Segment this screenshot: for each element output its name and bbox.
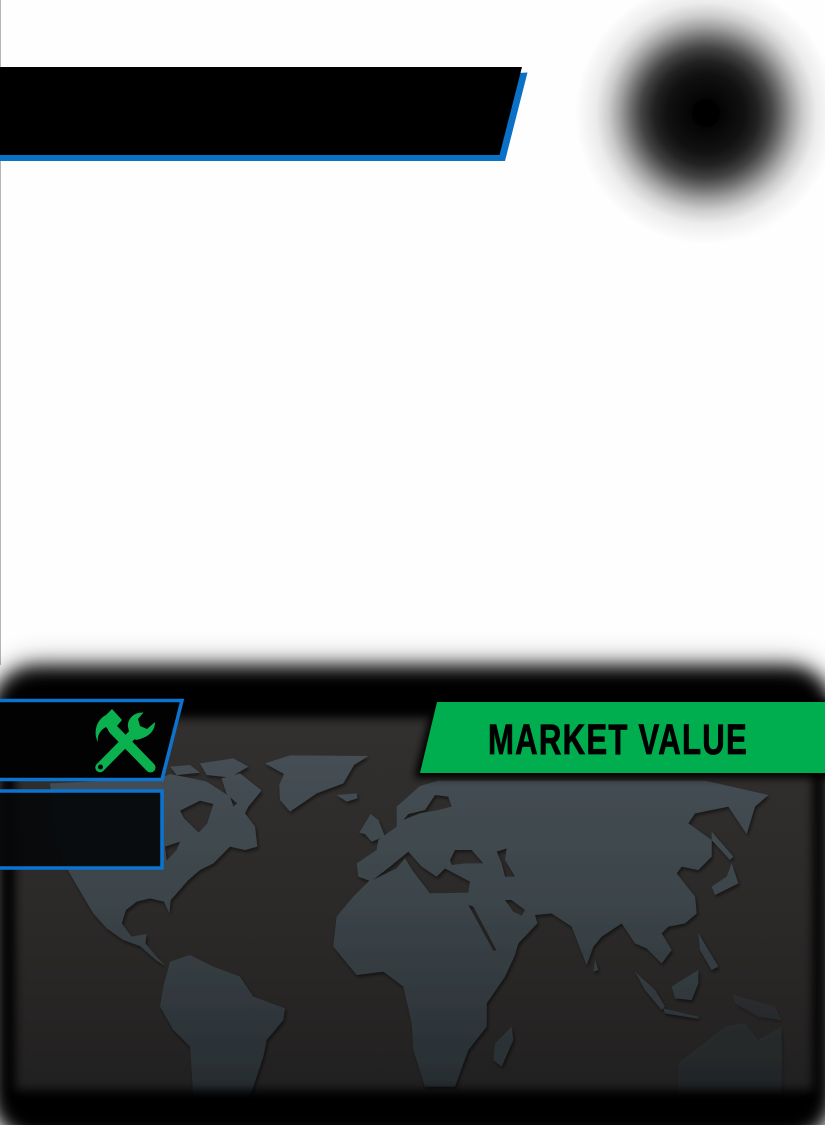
left edge line [0,0,1,665]
banner blue edge [0,72,528,161]
title banner [0,67,528,161]
world map [0,700,825,1110]
continents [50,755,782,1097]
south america [160,955,285,1097]
empty info box [0,791,162,868]
iceland [337,793,357,802]
hammer [96,709,150,768]
banner green shape [420,702,825,773]
eurasia and africa [333,781,768,1087]
wrench [98,712,155,770]
blurred black orb [576,0,825,244]
panel black frame [0,667,825,1125]
panel soft outer glow [0,660,825,1125]
market value banner [420,702,825,773]
market value banner shadow [414,700,825,778]
banner black body [0,67,522,155]
new guinea [733,995,782,1020]
icon: hammer and wrench [96,709,155,770]
map background [0,700,825,1110]
tools box outline [0,700,182,780]
madagascar [493,1027,513,1067]
greenland [265,755,368,812]
australia [678,1024,782,1084]
arctic islands [170,758,262,806]
britain [359,814,385,842]
panel: market value map [0,660,825,1125]
asia islands [593,832,738,1019]
north america [50,774,261,966]
tools box [0,700,182,780]
